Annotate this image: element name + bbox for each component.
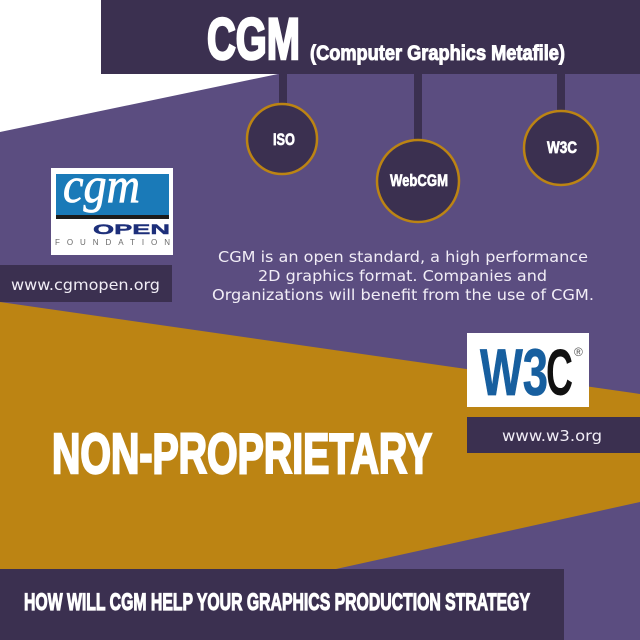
url bar: w3: www.w3.org [502,427,602,445]
gold band [0,302,640,569]
url bar: cgmopen [0,265,172,302]
heading: non-proprietary: NON-PROPRIETARY [52,422,432,486]
description text: Organizations will benefit from the use of CGM. [212,286,594,304]
node: ISO [247,74,317,174]
node: WebCGM [377,74,459,222]
node: W3C: W3C [547,138,577,157]
logo: CGM Open Foundation: OPEN [93,221,170,237]
logo: W3C: C [546,335,573,409]
logo: CGM Open Foundation: cgm [63,157,140,213]
node: W3C [524,74,598,185]
logo: CGM Open Foundation: FOUNDATION [55,238,170,247]
subtitle: (Computer Graphics Metafile) [310,42,565,65]
description text [212,248,594,304]
description text: 2D graphics format. Companies and [258,267,547,285]
title bar [101,0,640,74]
node: WebCGM: WebCGM [390,171,448,190]
url bar: cgmopen: www.cgmopen.org [11,276,160,294]
title: CGM [207,7,300,72]
url bar: w3 [467,417,640,453]
description text: CGM is an open standard, a high performance [218,248,588,266]
logo: W3C: ® [574,345,583,359]
logo: CGM Open Foundation [51,157,173,255]
bottom bar [0,569,564,640]
node: ISO: ISO [273,130,295,149]
logo: W3C: W3 [480,335,548,409]
white corner shape [0,0,278,132]
